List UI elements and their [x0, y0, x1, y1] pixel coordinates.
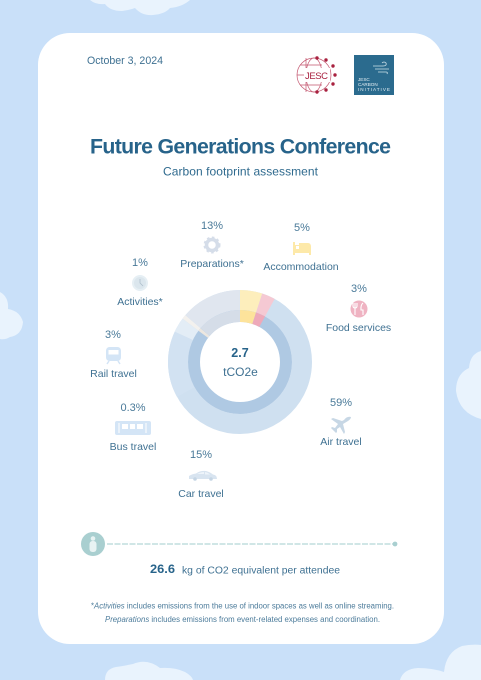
logo: JESC Carbon Initiative	[354, 55, 394, 95]
footnote: activities: *Activities includes emissions from the use of indoor spaces as well as online streaming.	[91, 602, 394, 610]
date: October 3, 2024	[87, 55, 163, 67]
category: car travel: Car travel	[178, 488, 224, 500]
per-attendee value: 26.6	[150, 562, 175, 576]
subtitle: Carbon footprint assessment	[163, 164, 319, 178]
logo: JESC: JESC	[305, 71, 328, 82]
category: food services	[326, 283, 391, 334]
category: food services: Food services	[326, 322, 391, 334]
category: accommodation: 5%	[294, 222, 310, 234]
category: air travel: 59%	[330, 397, 352, 409]
footnote: preparations: Preparations includes emissions from event-related expenses and coordination.	[105, 615, 380, 624]
card panel	[38, 33, 444, 644]
category: air travel	[320, 397, 362, 448]
category: preparations	[180, 220, 244, 270]
category: preparations: 13%	[201, 220, 223, 232]
category: activities	[117, 257, 163, 308]
category: activities: 1%	[132, 257, 148, 269]
inner ring segments	[175, 297, 305, 427]
per-attendee label: kg of CO2 equivalent per attendee	[182, 566, 340, 576]
category: bus travel: 0.3%	[120, 402, 146, 414]
category: activities: Activities*	[117, 296, 163, 308]
category: accommodation	[263, 222, 339, 273]
outer ring segments	[153, 275, 327, 449]
donut centre value: 2.7	[231, 346, 249, 360]
logo: JESC Carbon Initiative: JESC	[358, 77, 370, 82]
donut chart	[153, 275, 327, 449]
category: rail travel: 3%	[105, 329, 121, 341]
category: bus travel	[110, 402, 156, 453]
category: car travel: 15%	[190, 449, 212, 461]
category: accommodation: Accommodation	[263, 261, 339, 273]
donut centre unit: tCO2e	[223, 365, 258, 379]
logo: JESC Carbon Initiative: CARBON	[358, 82, 378, 87]
category: bus travel: Bus travel	[110, 441, 156, 453]
logo: JESC	[297, 56, 337, 94]
category: rail travel: Rail travel	[90, 368, 137, 380]
category: rail travel	[90, 329, 137, 380]
category: preparations: Preparations*	[180, 258, 244, 270]
title: Future Generations Conference	[90, 134, 391, 158]
category: food services: 3%	[351, 283, 367, 295]
category: air travel: Air travel	[320, 436, 362, 448]
logo: JESC Carbon Initiative: INITIATIVE	[358, 87, 390, 92]
per-attendee timeline	[81, 532, 397, 556]
category: car travel	[178, 449, 224, 500]
